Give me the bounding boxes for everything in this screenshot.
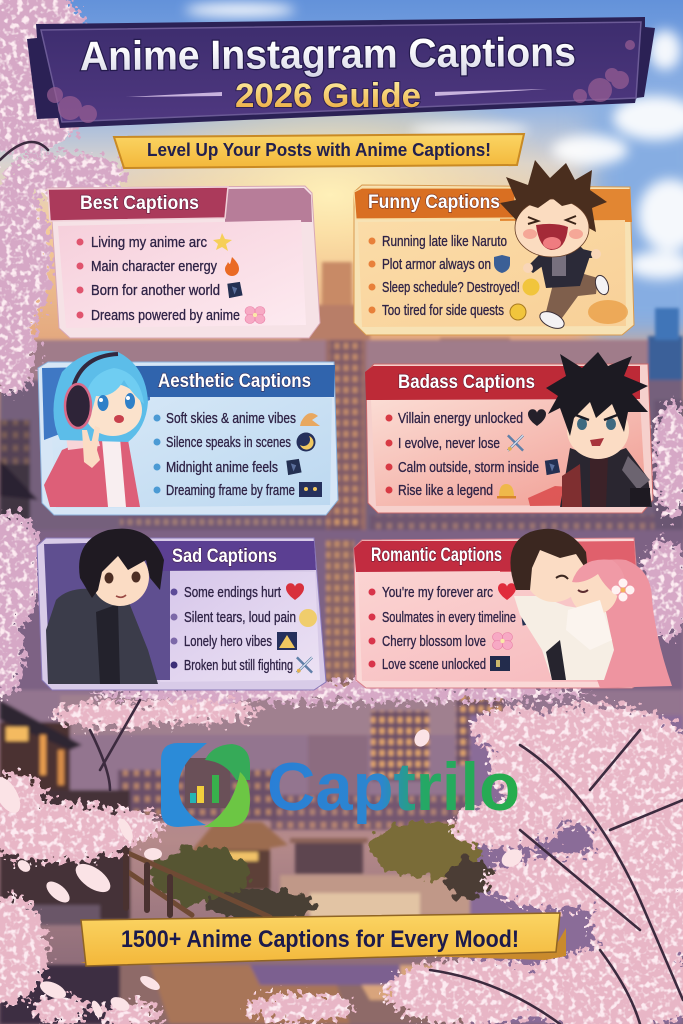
mouth — [590, 438, 604, 446]
orange corner paint — [588, 300, 628, 324]
card header — [48, 187, 228, 221]
hair — [546, 352, 648, 436]
caption row: Calm outside, storm inside — [398, 460, 539, 476]
top band — [500, 541, 636, 572]
logo icon — [161, 743, 250, 827]
caption row: Midnight anime feels — [166, 460, 278, 476]
house roofs — [180, 822, 288, 890]
caption row: Cherry blossom love — [382, 634, 486, 650]
subtitle right rule — [435, 89, 547, 96]
panel: sad captions — [37, 529, 326, 690]
blue sky on right — [590, 100, 683, 340]
hair flower — [612, 578, 634, 602]
house backdrop — [185, 758, 230, 808]
card header — [354, 188, 515, 219]
caption row: I evolve, never lose — [398, 436, 500, 452]
caption row: Living my anime arc — [91, 235, 207, 251]
caption row: Lonely hero vibes — [184, 634, 272, 650]
girl fringe — [572, 559, 626, 600]
inner shirt — [590, 456, 608, 507]
sun glow — [95, 70, 565, 320]
hood fur — [66, 430, 100, 450]
footer text: 1500+ Anime Captions for Every Mood! — [121, 926, 519, 953]
card heading: Aesthetic Captions — [158, 371, 311, 392]
boy face — [524, 542, 584, 602]
open mouth — [536, 224, 568, 250]
card heading: Romantic Captions — [371, 545, 502, 566]
banner blossom decoration — [47, 40, 635, 123]
hands — [523, 249, 601, 273]
card body — [58, 220, 306, 328]
panel: aesthetic captions — [38, 351, 338, 515]
caption row: Sleep schedule? Destroyed! — [382, 280, 520, 296]
title banner — [27, 17, 655, 128]
shoes — [537, 274, 611, 332]
ribbon shape — [114, 134, 524, 168]
green bottom swoosh — [204, 772, 250, 827]
boy closed eye — [556, 576, 568, 579]
left colour wash — [42, 366, 150, 440]
caption row: Running late like Naruto — [382, 234, 507, 250]
character: dark haired boy — [546, 352, 652, 507]
wooden railing — [126, 850, 270, 917]
subtitle left rule — [126, 92, 222, 97]
caption row: Villain energy unlocked — [398, 411, 523, 427]
caption row: Main character energy — [91, 259, 218, 275]
card header — [365, 366, 640, 400]
card body — [160, 572, 320, 682]
red paint stroke — [528, 486, 640, 506]
card frame — [37, 538, 326, 690]
card body — [358, 572, 640, 682]
striped sleeve — [622, 456, 650, 490]
card body — [48, 372, 332, 508]
face — [567, 401, 629, 459]
girl sleeve — [566, 600, 612, 650]
left wash — [44, 541, 170, 680]
jacket — [538, 246, 590, 288]
title text: Anime Instagram Captions — [80, 29, 576, 79]
card heading: Badass Captions — [398, 372, 535, 393]
tagline text: Level Up Your Posts with Anime Captions! — [147, 139, 491, 160]
ribbon folded ends — [80, 928, 566, 966]
panel: best captions — [48, 186, 320, 338]
subtitle text: 2026 Guide — [235, 77, 421, 115]
card body — [371, 400, 646, 506]
headphones — [65, 354, 118, 428]
boy jacket — [514, 596, 614, 680]
card heading: Funny Captions — [368, 192, 500, 213]
caption row: Love scene unlocked — [382, 657, 486, 673]
card body — [358, 220, 626, 327]
eyes — [573, 414, 620, 430]
mouth — [116, 595, 126, 597]
caption row: Too tired for side quests — [382, 303, 504, 319]
jacket — [44, 434, 140, 507]
card header — [354, 541, 518, 572]
card frame — [38, 362, 338, 515]
clouds — [185, 3, 683, 279]
hair back — [53, 351, 148, 442]
hair fringe — [515, 182, 590, 222]
card top band — [500, 189, 632, 222]
ribbon shape — [81, 913, 560, 966]
caption row: Some endings hurt — [184, 585, 281, 601]
caption row: Soulmates in every timeline — [382, 610, 516, 626]
card frame — [354, 538, 645, 688]
caption row: Soft skies & anime vibes — [166, 411, 296, 427]
character: blue haired girl — [44, 351, 148, 507]
hair — [79, 529, 164, 598]
arms — [526, 248, 595, 273]
caption row: Silent tears, loud pain — [184, 610, 296, 626]
caption row: Dreams powered by anime — [91, 308, 240, 324]
eyes — [104, 572, 140, 584]
banner fill — [41, 22, 641, 122]
caption row: Rise like a legend — [398, 483, 493, 499]
logo: captrilo — [161, 743, 520, 827]
card frame — [366, 364, 653, 513]
tie — [546, 640, 566, 680]
character: embracing couple — [510, 529, 672, 688]
character: running chibi boy — [500, 160, 611, 332]
caption row: Dreaming frame by frame — [166, 483, 295, 499]
panel: funny captions — [354, 160, 634, 335]
panel: badass captions — [365, 352, 653, 513]
jacket — [560, 448, 652, 507]
blue swoosh — [161, 743, 207, 827]
hoodie — [46, 589, 158, 684]
road — [100, 965, 600, 1024]
eyes — [98, 393, 135, 411]
chart bars — [190, 793, 196, 803]
mouth — [114, 415, 124, 423]
left house — [0, 722, 70, 792]
card heading: Sad Captions — [172, 546, 277, 567]
face — [91, 548, 149, 606]
character: hooded boy — [46, 529, 164, 684]
caption row: Broken but still fighting — [184, 658, 293, 674]
girl closed eye — [578, 590, 588, 592]
legs — [546, 270, 598, 318]
panel: romantic captions — [354, 529, 672, 688]
card frame — [49, 186, 320, 338]
tagline ribbon — [114, 134, 524, 168]
caption row: You're my forever arc — [382, 585, 493, 601]
card header — [120, 365, 335, 397]
girl face — [570, 565, 618, 615]
card top band — [225, 188, 312, 222]
card frame — [354, 185, 634, 335]
shirt — [102, 438, 126, 507]
dark lower right — [470, 715, 683, 1024]
peace hand — [82, 426, 100, 468]
face — [84, 384, 142, 436]
caption row: Plot armor always on — [382, 257, 491, 273]
blush — [523, 229, 583, 239]
hair back — [500, 160, 607, 232]
green top swoosh — [205, 744, 250, 780]
card header — [150, 541, 316, 571]
closed eyes — [528, 216, 576, 224]
footer ribbon — [80, 913, 566, 966]
banner frame — [27, 17, 655, 128]
hair fringe — [84, 368, 144, 424]
boy hair — [510, 529, 588, 590]
girl long hair — [572, 559, 672, 688]
caption row: Silence speaks in scenes — [166, 435, 291, 451]
logo wordmark: Captrilo — [267, 749, 520, 825]
far skyline — [0, 262, 683, 1024]
hand — [630, 488, 650, 506]
falling petals — [0, 727, 526, 1019]
face — [515, 199, 589, 257]
caption row: Born for another world — [91, 283, 220, 299]
card heading: Best Captions — [80, 193, 199, 214]
foliage — [150, 822, 495, 921]
shirt — [552, 252, 566, 276]
blossom clusters — [0, 0, 683, 703]
hoodie inner — [96, 604, 120, 684]
